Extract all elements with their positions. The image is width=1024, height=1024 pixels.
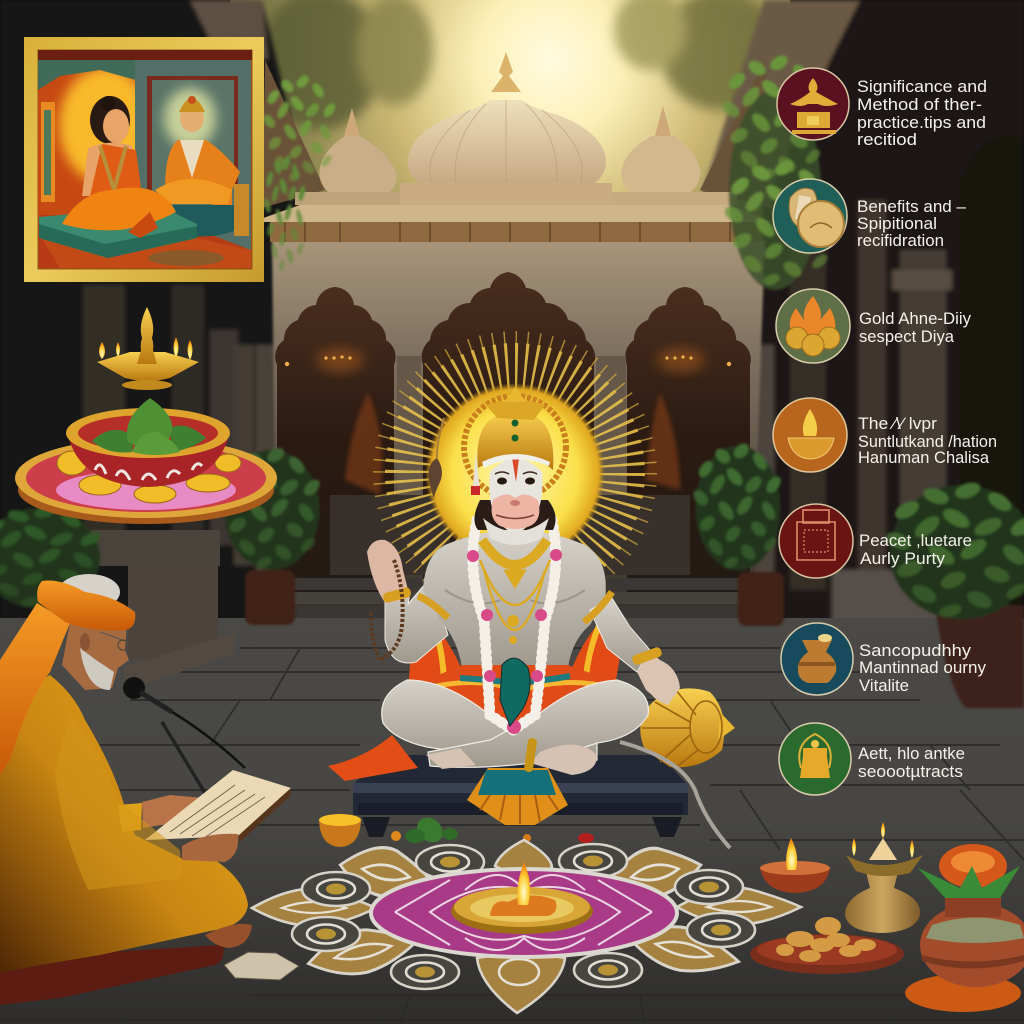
vine top left [262,73,337,273]
right sash [572,607,622,680]
topic 7 [779,723,965,795]
topic 2: Benefits and – [857,198,967,216]
lower hand [182,834,238,862]
brass pot [845,822,923,933]
green dais [39,206,197,258]
topic 1: Method of ther- [857,96,982,114]
topic 6: Sancopudhhy [859,642,972,660]
turban [37,580,135,630]
terracotta pot [918,844,1024,987]
knot [500,658,530,726]
temple facade wall [272,240,765,610]
arm left with raised hand [367,540,448,663]
pleated fan [467,768,568,825]
petals [252,840,801,1013]
hands [142,795,204,828]
chandeliers [285,355,731,366]
floating tail tip [429,418,444,498]
robe [0,675,248,973]
plate [18,456,274,524]
foot [205,924,252,948]
cards on floor [224,952,299,980]
diagonal roofs [262,60,325,208]
book [145,770,291,842]
topic 2 [773,179,967,253]
arches [275,272,751,600]
skull cap [58,574,120,610]
radiant halo [385,343,645,603]
steps [280,578,746,620]
pot plant near right arch [692,441,784,626]
topic 4 [773,398,997,472]
icon: oil lamp [773,398,847,472]
right colonnade [700,0,1024,660]
topic 6: Vitalite [859,677,909,695]
right arm [590,598,650,672]
flames [99,337,192,360]
platform [353,755,688,837]
oil lamp above [97,307,199,390]
head [464,387,566,545]
marigold mat [905,974,1021,1012]
tilak [512,458,519,482]
topic 7: seoootµtracts [858,763,963,781]
plants [0,53,1024,708]
left sash [408,607,460,690]
offering bowl on plate [15,307,277,524]
topic 2: Spipitional [857,215,937,233]
icon: book and coin [773,179,847,253]
inset painting [24,37,264,282]
ritual objects [750,822,1024,1012]
plate of sweets [750,917,904,974]
mic [123,677,245,793]
icon: gold vessel [779,723,851,795]
leaves [391,813,458,847]
floor [0,618,1024,1024]
necklaces [480,540,550,630]
round dais [173,205,237,237]
neck and face [62,622,129,690]
crown [477,412,553,470]
sky glow and hazy trees [230,0,790,240]
left niche [38,62,172,215]
far left plant [0,504,103,608]
tree canopy [258,0,780,130]
seated figure left [62,96,176,238]
loop motifs [292,844,755,989]
topic 1 [777,68,987,149]
bowl [68,434,229,487]
carpet [38,232,251,268]
gold frame [24,37,264,282]
armbands [418,596,448,618]
icon: gold diya flames [776,289,850,363]
betel leaves [92,398,206,455]
central plate [451,862,593,934]
hand on mace [637,657,680,705]
topic 4: Hanuman Chalisa [858,449,990,467]
gold ring [464,396,566,498]
vine top right [721,53,835,290]
chest shading [445,590,585,603]
topic 5 [779,504,972,578]
Hanuman [328,343,735,837]
icon: copper urn [781,623,853,695]
topic 4: The ∕\∕ lvpr [858,415,938,433]
front sleeve [55,715,182,890]
left plinth [85,530,235,690]
topic 4: Suntlutkand /hation [858,433,997,451]
rear tail [620,742,730,848]
topic 1: Significance and [857,78,987,96]
dhoti [415,665,615,730]
right column of topics [773,68,997,795]
topic 2: recifidration [857,232,944,250]
eaves and frieze [252,183,770,242]
seated figure right [155,96,240,214]
icon: temple shrine [777,68,849,140]
cushion [0,945,224,1005]
priest reciting [0,574,291,1005]
eyes [495,472,537,484]
icon: shrine outline [779,504,853,578]
topic 6 [781,623,987,695]
garlands [473,520,556,730]
topic 1: practice.tips and [857,114,986,132]
far right pot plant [883,480,1024,708]
right panel [135,56,251,250]
topic 5: Peacet ,luetare [859,532,972,550]
topic 6: Mantinnad ourny [859,659,987,677]
topic 3 [776,289,972,363]
domes [319,52,700,192]
mace [640,688,735,768]
garland flowers [467,549,562,734]
topic 3: sespect Diya [859,328,955,346]
left cloth drape [328,735,418,781]
pot plant near left arch [220,445,322,625]
torso [423,530,606,668]
topic 5: Aurly Purty [860,550,946,568]
left colonnade [0,0,300,640]
muzzle [492,494,539,529]
small lamp and leaves [319,813,594,847]
crossed legs [382,680,648,775]
clay diya [760,838,830,893]
topic 1: recitiod [857,131,917,149]
topic 7: Aett, hlo antke [858,745,965,763]
magenta mandala [371,869,677,957]
turban tail [0,603,70,775]
rangoli [252,840,801,1013]
topic 3: Gold Ahne-Diiy [859,310,972,328]
